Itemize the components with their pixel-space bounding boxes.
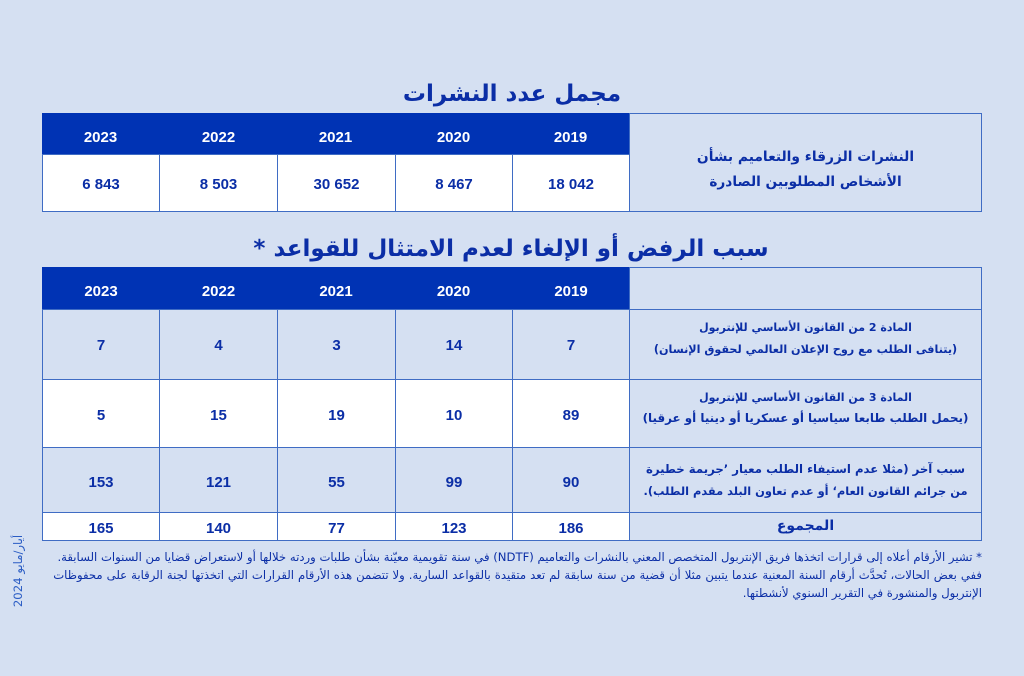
header row: years: 2022: [202, 128, 235, 146]
row: other reason: 121: [206, 474, 231, 490]
table: notices and diffusions issued: [42, 113, 982, 212]
data row: notice counts: 8 503: [200, 176, 237, 192]
row: other reason: 90: [563, 474, 579, 490]
row: article 2: (يتنافى الطلب مع روح الإعلان العالمي لحقوق الإنسان): [654, 343, 957, 356]
row: other reason: من جرائم القانون العام‘ أو عدم تعاون البلد مقدم الطلب).: [644, 484, 968, 498]
header row: years: 2019: [554, 128, 587, 146]
row: article 3: 15: [210, 407, 227, 424]
header row: years: 2020: [437, 283, 470, 300]
row label: notices and diffusions: [629, 113, 982, 212]
row: article 2: 3: [332, 337, 341, 354]
row: other reason: [42, 448, 982, 512]
header row: years: 2022: [202, 283, 235, 300]
row: total: 165: [88, 520, 114, 537]
row: total: المجموع: [777, 518, 834, 534]
footnote: ففي بعض الحالات، تُحدَّث أرقام السنة المعنية عندما يتبين مثلا أن قضية من سنة سابقة لم تعد متقيدة بالقواعد السارية. ولا تتضمن هذه الأرقام القرارات التي اتخذتها لجنة الرقابة على محفوظات: [53, 568, 982, 582]
header row: years: 2019: [554, 283, 588, 300]
data row: notice counts: [42, 154, 629, 212]
row: article 3: المادة 3 من القانون الأساسي للإنتربول: [699, 391, 912, 404]
header row: years: [42, 267, 982, 309]
data row: notice counts: 6 843: [82, 176, 120, 192]
data row: notice counts: 8 467: [435, 176, 473, 192]
header row: years: 2023: [84, 283, 118, 300]
header row: years: 2020: [437, 128, 470, 146]
row: total: 186: [558, 520, 584, 537]
row label: notices and diffusions: النشرات الزرقاء والتعاميم بشأن: [697, 149, 914, 165]
row: other reason: 153: [88, 474, 114, 490]
row: article 2: المادة 2 من القانون الأساسي للإنتربول: [699, 321, 912, 334]
title: reason for refusal or cancellation: سبب الرفض أو الإلغاء لعدم الامتثال للقواعد *: [253, 236, 769, 262]
data row: notice counts: 30 652: [314, 176, 359, 192]
row: other reason: سبب آخر (مثلا عدم استيفاء الطلب معيار ’جريمة خطيرة: [646, 462, 965, 476]
row: total: 123: [441, 520, 467, 537]
header row: years: 2021: [319, 128, 352, 146]
row: article 3: [42, 380, 982, 447]
row: total: [42, 513, 982, 541]
footnote: الإنتربول والمنشورة في التقرير السنوي لأنشطتها.: [743, 586, 982, 600]
header row: years: 2021: [319, 283, 353, 300]
row: total: 77: [328, 520, 345, 537]
row: article 3: 5: [97, 407, 105, 424]
row: article 3: 89: [563, 407, 579, 424]
row: article 2: 4: [214, 337, 223, 354]
row: article 3: 19: [328, 407, 345, 424]
row: article 2: 7: [97, 337, 105, 354]
row: other reason: 99: [446, 474, 462, 490]
row: article 3: 10: [446, 407, 462, 424]
data row: notice counts: 18 042: [548, 176, 594, 192]
table: reasons: [42, 267, 982, 541]
row: other reason: 55: [328, 474, 345, 490]
footnote: * تشير الأرقام أعلاه إلى قرارات اتخذها فريق الإنتربول المتخصص المعني بالنشرات والتعاميم (NDTF) في سنة تقويمية معيّنة بشأن طلبات وردته خلالها أو لاستعراض قضايا من السنوات السابقة.: [57, 550, 982, 564]
row label: notices and diffusions: الأشخاص المطلوبين الصادرة: [709, 174, 902, 190]
row: article 2: 14: [446, 337, 462, 354]
row: article 2: 7: [567, 337, 575, 354]
row: article 3: (يحمل الطلب طابعا سياسيا أو عسكريا أو دينيا أو عرقيا): [643, 411, 968, 425]
row: article 2: [42, 309, 982, 379]
title: total notices: مجمل عدد النشرات: [403, 81, 621, 107]
header row: years: 2023: [84, 128, 117, 146]
date label: أيار/مايو 2024: [11, 535, 25, 607]
row: total: 140: [206, 520, 231, 537]
header row: years: [42, 113, 630, 155]
footnote: [53, 549, 982, 600]
